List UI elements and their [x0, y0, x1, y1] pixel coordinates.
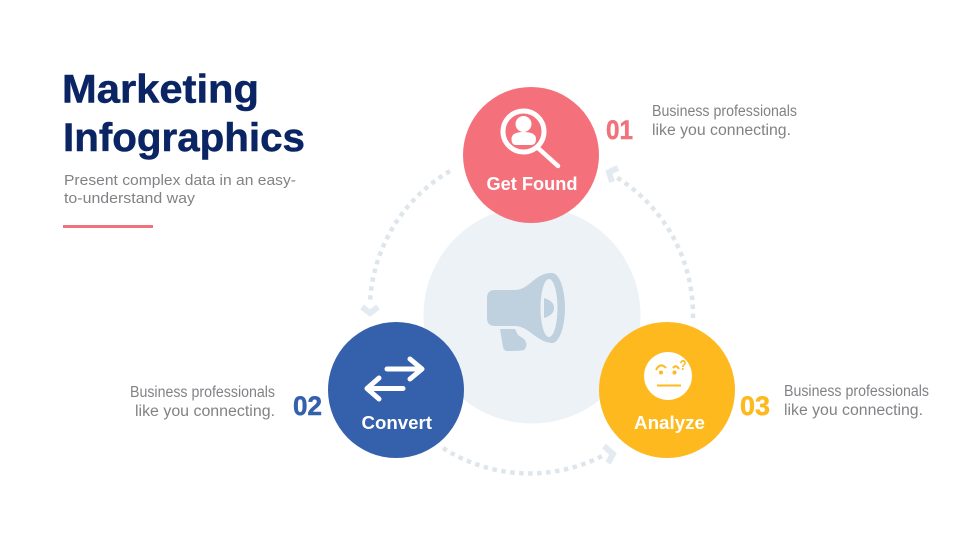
icon: exchange arrows	[367, 359, 422, 399]
step: get found	[463, 87, 797, 223]
arrow: analyze to get found	[609, 168, 693, 318]
title	[62, 68, 305, 160]
subtitle: to-understand way	[64, 190, 196, 207]
step: convert	[130, 322, 464, 458]
icon: thinking face	[644, 352, 692, 400]
convert circle	[328, 322, 464, 458]
description 01: Business professionals	[652, 103, 797, 120]
description 03: like you connecting.	[784, 402, 923, 419]
convert label: Convert	[362, 413, 432, 433]
title: Infographics	[63, 116, 305, 160]
cycle arrows	[362, 168, 693, 473]
description 01: like you connecting.	[652, 122, 791, 139]
description 02	[130, 384, 275, 420]
icon: megaphone	[487, 273, 565, 351]
get found label: Get Found	[486, 174, 578, 194]
title: Marketing	[62, 68, 259, 112]
icon: thinking face: ?	[680, 357, 686, 374]
description 03: Business professionals	[784, 383, 929, 400]
description 02: like you connecting.	[135, 403, 275, 420]
description 01	[652, 103, 797, 139]
description 03	[784, 383, 929, 419]
center circle	[424, 206, 640, 424]
number 01: 01	[606, 115, 633, 145]
number 03: 03	[740, 391, 770, 421]
accent rule	[63, 225, 153, 228]
arrow: convert to analyze	[443, 446, 613, 473]
arrow: get found to convert	[362, 171, 450, 313]
subtitle	[64, 172, 296, 207]
analyze label: Analyze	[634, 413, 705, 433]
get found circle	[463, 87, 599, 223]
description 02: Business professionals	[130, 384, 275, 401]
step: analyze	[599, 322, 929, 458]
subtitle: Present complex data in an easy-	[64, 172, 296, 189]
number 02: 02	[293, 391, 322, 421]
icon: magnifier with person	[503, 111, 558, 166]
analyze circle	[599, 322, 735, 458]
